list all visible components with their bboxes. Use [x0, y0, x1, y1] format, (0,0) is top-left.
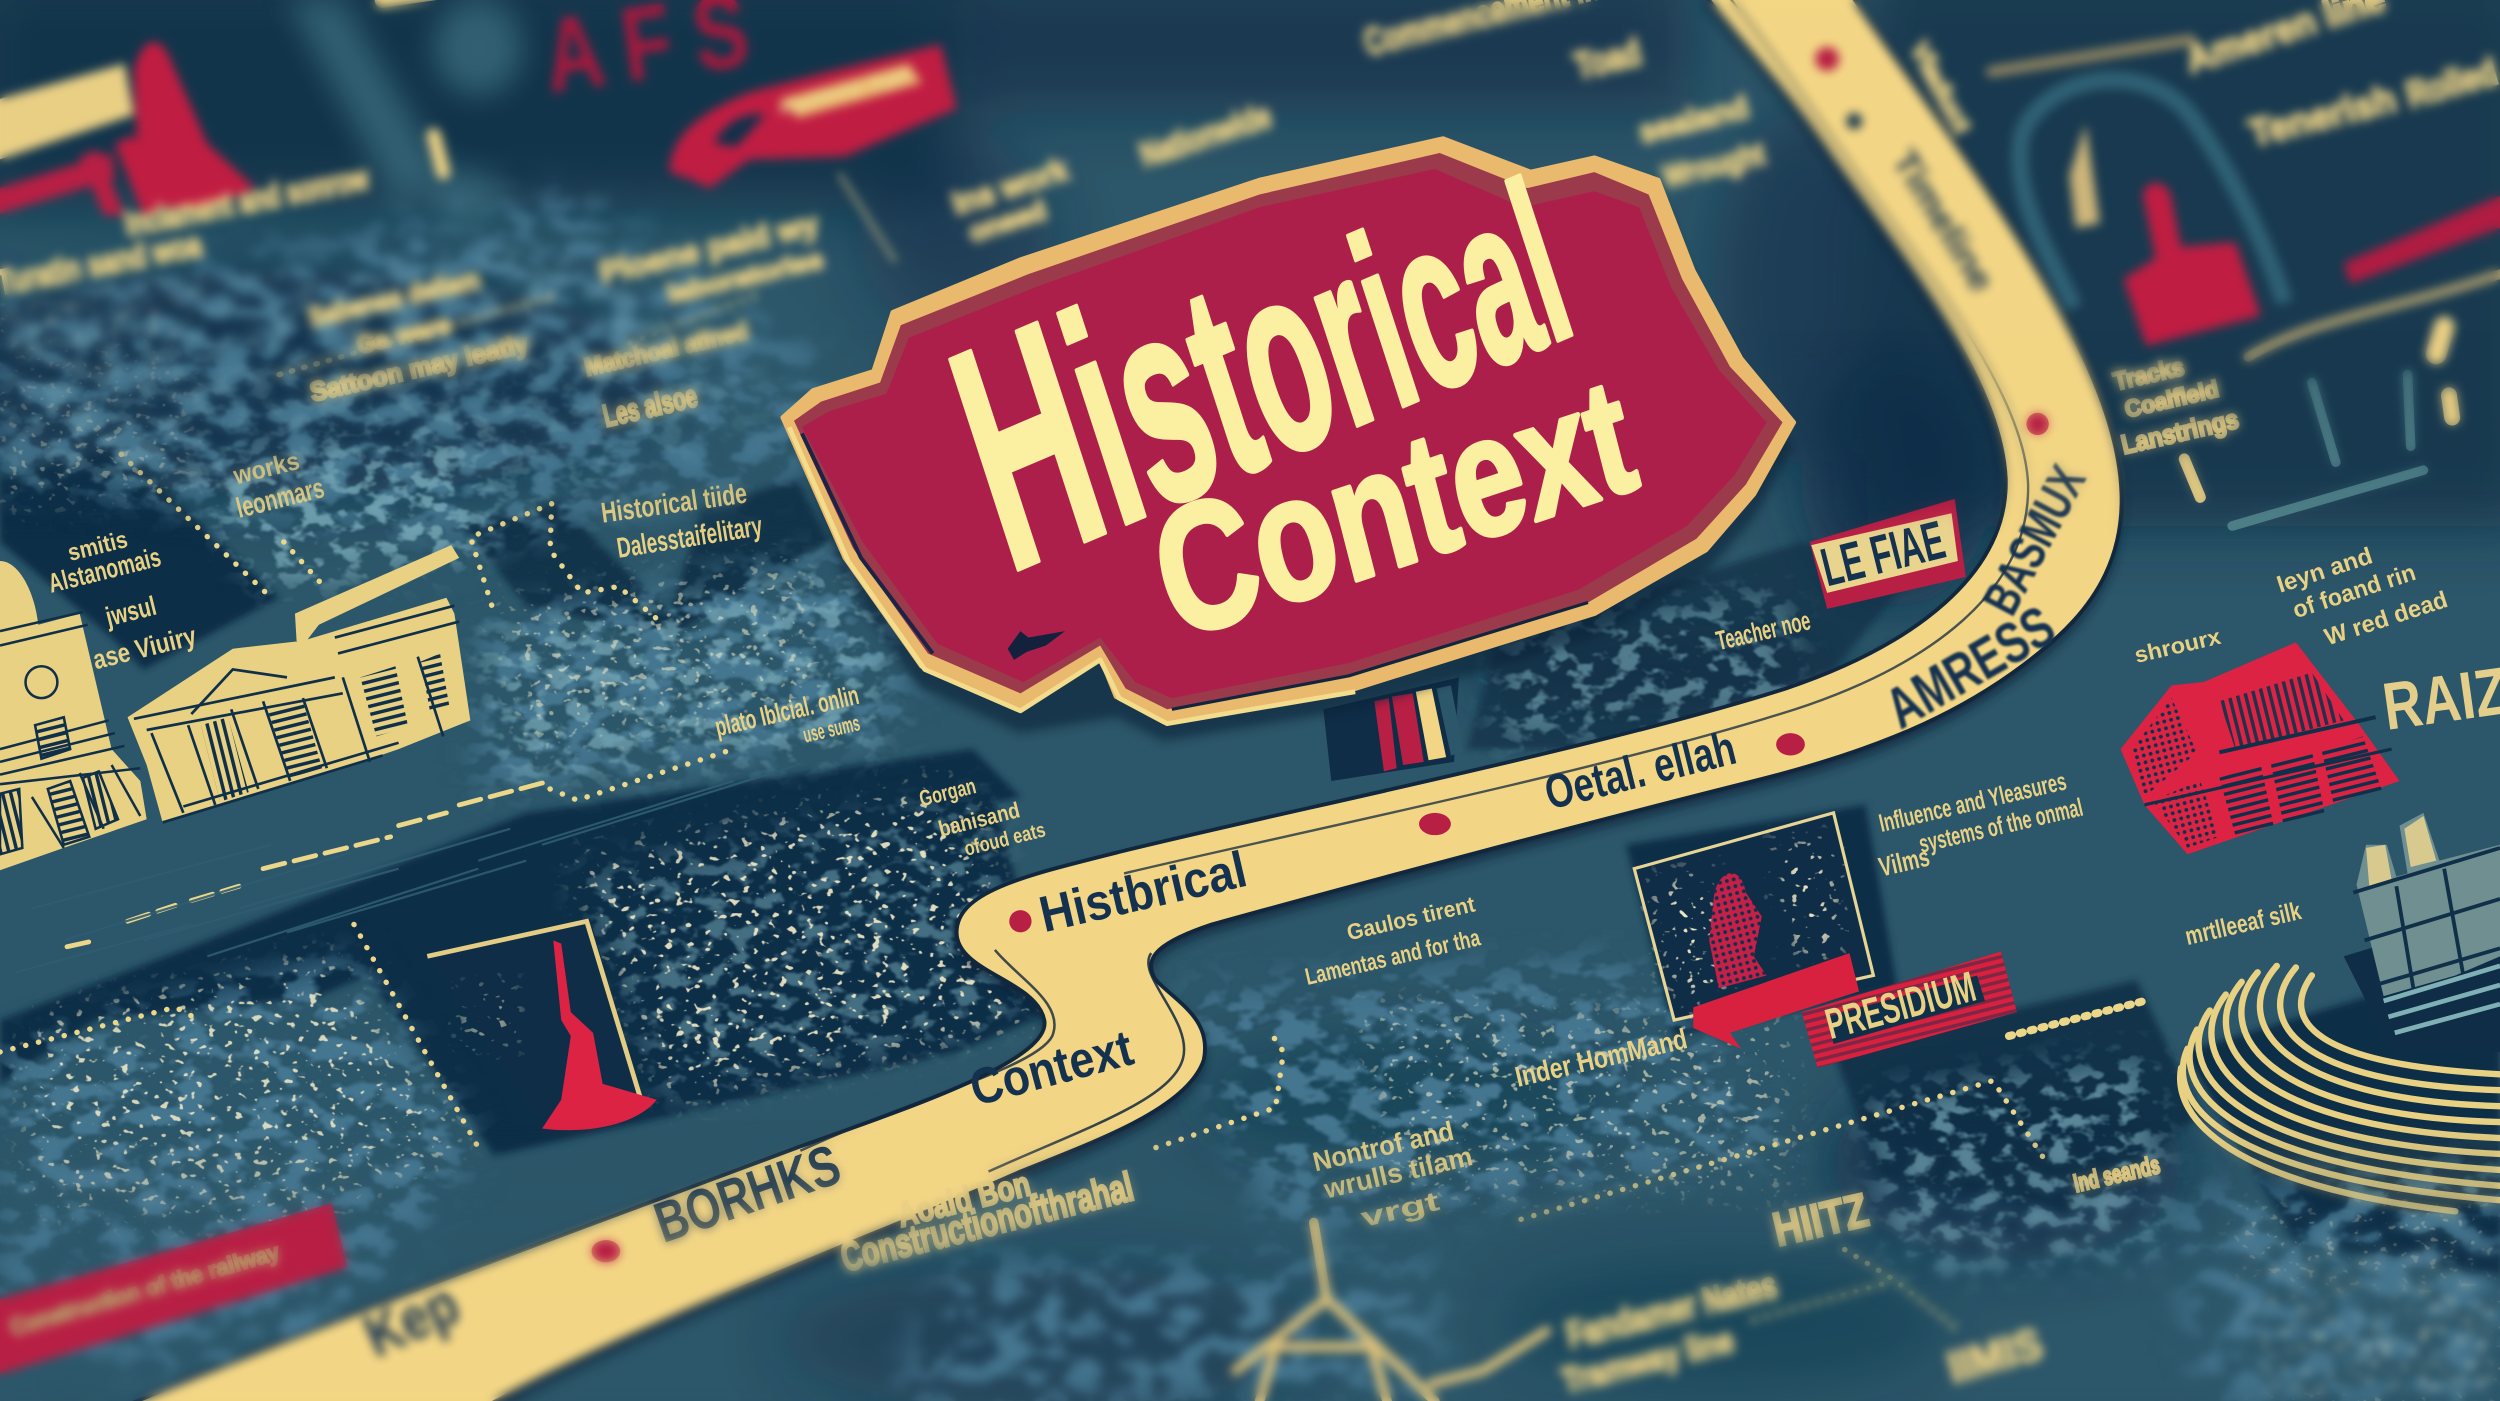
dotted route lines — [0, 175, 2144, 1332]
sharp annotations: Teacher noe — [1713, 604, 1813, 656]
road labels: Kep — [354, 1269, 469, 1370]
out of focus annotations: Ploene paid wy — [596, 205, 822, 291]
right side teal posts — [2232, 375, 2423, 526]
sharp annotations: leonmars — [233, 472, 327, 525]
sharp annotations: Dalesstaifelitary — [615, 510, 765, 565]
sharp annotations: Les alsoe — [599, 377, 701, 434]
out of focus annotations: vrgt — [1358, 1185, 1442, 1233]
sharp annotations: Inder HomMand — [1512, 1023, 1690, 1094]
red title banner lower: PRESIDIUM — [1821, 963, 1981, 1049]
sharp annotations: Influence and Yleasures — [1876, 768, 2069, 838]
bottom left red banner: Construction of the railway — [7, 1238, 283, 1341]
top left red building — [0, 42, 255, 215]
out of focus annotations: of foand rin — [2289, 559, 2419, 624]
out of focus annotations: Ieyn and — [2273, 542, 2376, 599]
out of focus annotations: Ga wars — [354, 311, 453, 360]
road labels: BASMUX — [1971, 456, 2097, 624]
out of focus annotations: Sabenes deliam — [305, 263, 483, 333]
red car — [670, 45, 957, 188]
top right arch — [2020, 80, 2285, 308]
bottom left red banner — [0, 1203, 348, 1374]
out of focus annotations: Toad — [1570, 31, 1646, 88]
road labels: Histbrical — [1034, 840, 1252, 943]
red stamp icon — [2124, 183, 2261, 346]
sharp annotations — [45, 377, 2304, 1094]
out of focus annotations: W red dead — [2321, 586, 2451, 651]
out of focus annotations: Inclament and sonrow — [122, 158, 372, 244]
gold clock tower — [0, 561, 147, 870]
out of focus annotations: HIITZ — [1768, 1184, 1873, 1257]
sharp annotations: Historical tiide — [599, 478, 749, 530]
road labels: Context — [964, 1019, 1139, 1117]
road markers — [592, 47, 2049, 1262]
out of focus annotations: wrulls tilam — [1320, 1140, 1475, 1205]
red title banner lower — [1802, 952, 2017, 1068]
out of focus annotations: Wrought — [1659, 135, 1769, 195]
out of focus annotations: Coalfield — [2122, 376, 2221, 423]
sharp annotations: works — [230, 447, 302, 491]
sharp annotations: use sums — [801, 710, 862, 748]
out of focus annotations: Ins work — [948, 151, 1073, 222]
dark panels — [0, 446, 2500, 1275]
road labels: BORHKS — [647, 1133, 848, 1255]
icon: small sign glyph — [1008, 631, 1065, 660]
framed monument — [427, 918, 657, 1135]
title sign — [783, 55, 1794, 741]
sharp annotations: Gaulos tirent — [1344, 891, 1478, 945]
twin towers — [2344, 813, 2500, 1052]
top right red strip — [2344, 196, 2500, 284]
red banner upper: LE FIAE — [1816, 510, 1951, 598]
sharp annotations: smitis — [65, 526, 130, 567]
gold swirl — [2180, 966, 2500, 1211]
road labels: Timeline — [1884, 143, 2002, 299]
sharp annotations: jwsul — [102, 590, 159, 632]
out of focus annotations: Tenerish — [2245, 77, 2400, 155]
out of focus annotations: laboratories — [665, 246, 826, 309]
sharp annotations: Gorgan — [917, 773, 978, 811]
sharp annotations: Vilms — [1876, 841, 1932, 882]
sharp annotations: plato Iblcial. onlin — [712, 679, 862, 742]
out of focus annotations: Fandamer Nates — [1562, 1263, 1781, 1357]
road labels: AMRESS — [1875, 594, 2066, 741]
red house — [2121, 642, 2400, 854]
out of focus annotations: Constructionofthrahal — [836, 1163, 1138, 1281]
out of focus annotations: Sattoon may leatly — [307, 327, 531, 407]
icon: red figure — [1709, 873, 1767, 988]
red banner upper — [1810, 499, 1966, 609]
out of focus annotations: sealand — [1635, 88, 1752, 150]
gold neoclassical building — [128, 545, 470, 822]
sharp annotations: systems of the onmal — [1916, 794, 2086, 859]
sharp annotations: shrourx — [2132, 624, 2224, 668]
out of focus annotations: Matchoal atined — [582, 317, 751, 382]
sharp annotations: banisand — [936, 797, 1022, 842]
river dashes — [67, 781, 550, 947]
out of focus annotations: Tramway line — [1558, 1321, 1738, 1401]
sharp annotations: Lamentas and for tha — [1303, 924, 1483, 991]
framed figure picture — [1634, 813, 1873, 1049]
road labels: Oetal. ellah — [1540, 722, 1741, 820]
sharp annotations: Alstanomais — [45, 541, 164, 599]
title text: Context — [1135, 329, 1651, 678]
out of focus annotations: Viaduct — [1905, 37, 1976, 138]
out of focus annotations: Nationwide — [1135, 96, 1276, 175]
out of focus annotations: Aoaid Bon — [893, 1164, 1034, 1235]
red car: Railway Age — [777, 62, 913, 119]
bottom bridge outline — [1236, 1222, 1547, 1401]
bottom focus blur — [0, 1100, 2500, 1401]
gold blobs and trail, upper right — [383, 0, 2500, 497]
sharp annotations: ofoud eats — [962, 818, 1048, 861]
out of focus annotations: Nontrof and — [1310, 1115, 1457, 1177]
sign post stripes — [1323, 677, 1464, 781]
top focus blur — [0, 0, 2500, 560]
out of focus annotations: oneed — [965, 194, 1050, 248]
out of focus annotations: Ind seands — [2071, 1151, 2163, 1198]
sharp annotations: mrtlleeaf silk — [2183, 897, 2304, 951]
river hatching — [16, 765, 797, 972]
out of focus annotations: Tracks — [2111, 353, 2187, 396]
road labels — [354, 143, 2097, 1370]
out of focus annotations: Turatin sand woa — [0, 225, 205, 303]
out of focus annotations: IIMIS — [1942, 1320, 2048, 1393]
out of focus annotations: Lanstrings — [2118, 403, 2242, 460]
title text: Historical — [918, 55, 1601, 639]
icon: red bell monument — [542, 940, 657, 1130]
sharp annotations: ase Viuiry — [90, 620, 199, 675]
